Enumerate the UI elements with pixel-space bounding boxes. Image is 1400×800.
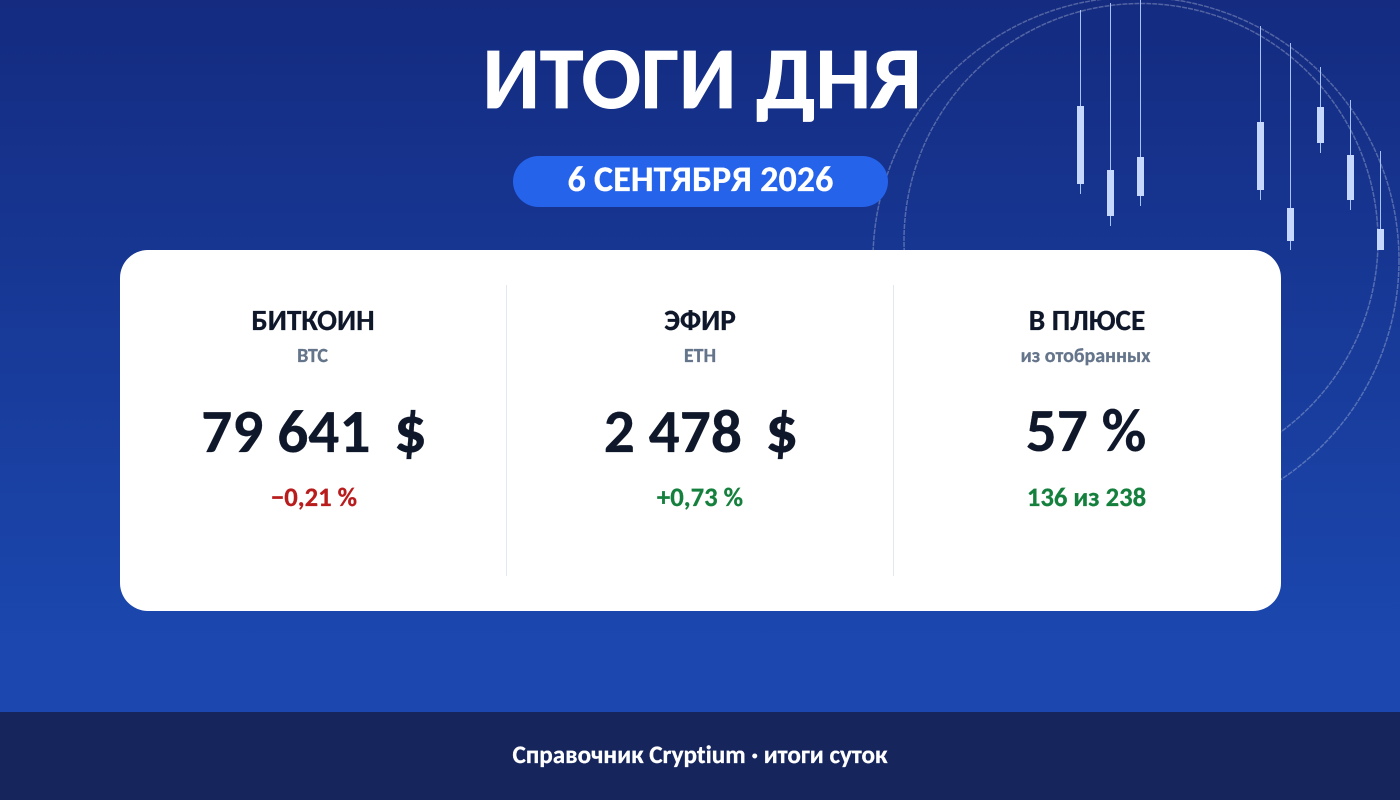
change: ether: +0,73 % (657, 482, 743, 514)
footer: Справочник Cryptium · итоги суток (513, 739, 887, 770)
date pill (513, 156, 888, 207)
ticker: btc: BTC (297, 344, 328, 368)
footer (0, 712, 1400, 800)
ticker: eth: ETH (684, 344, 716, 368)
divider two (893, 285, 894, 576)
value: gainers share: 57 % (1026, 394, 1146, 468)
column: gainers (1021, 302, 1150, 514)
heading: ether: ЭФИР (664, 302, 736, 338)
heading: bitcoin: БИТКОИН (251, 302, 375, 338)
column: ether (604, 302, 798, 514)
divider one (506, 285, 507, 576)
value: ether price: 2 478 $ (604, 390, 798, 470)
title: ИТОГИ ДНЯ (482, 24, 922, 132)
change: bitcoin: −0,21 % (271, 482, 357, 514)
count: gainers: 136 из 238 (1027, 482, 1146, 514)
column: bitcoin (201, 302, 427, 514)
value: bitcoin price: 79 641 $ (201, 390, 427, 470)
date pill: 6 СЕНТЯБРЯ 2026 (567, 157, 834, 201)
subheading: gainers: из отобранных (1021, 344, 1150, 368)
heading: gainers: В ПЛЮСЕ (1029, 302, 1145, 338)
panel: summary card (120, 250, 1281, 611)
